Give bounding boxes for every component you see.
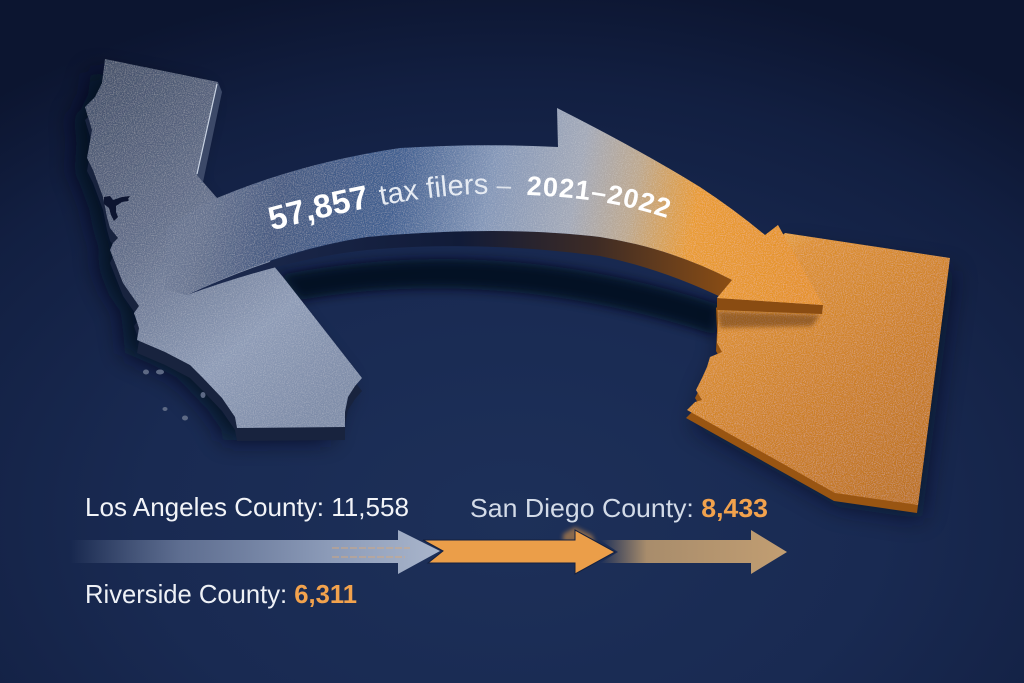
map: Arizona [686, 233, 950, 513]
arrow underside [187, 231, 732, 298]
California top surface [85, 59, 362, 428]
label: Los Angeles County: Los Angeles County: 11,558 [85, 492, 409, 522]
arrow: Riverside [423, 527, 615, 574]
label: Riverside County: Riverside County: 6,311 [85, 579, 357, 609]
Arizona extrusion [686, 241, 949, 513]
label: San Diego County: San Diego County: 8,433 [470, 493, 768, 523]
arrow head edge [717, 298, 823, 314]
arrow: San Diego [600, 530, 787, 574]
shadows [71, 71, 954, 519]
map: California [85, 59, 362, 441]
arrow shadow on Arizona [717, 311, 820, 328]
arrow label: 2021–2022 [527, 176, 670, 218]
arrow: Los Angeles [70, 530, 440, 574]
San Francisco bay [104, 196, 130, 221]
California extrusion [85, 72, 362, 441]
arrow label [268, 175, 670, 229]
big curved arrow [174, 108, 823, 330]
Arizona top surface [687, 233, 950, 505]
arrow label: tax filers [378, 175, 488, 205]
Channel islands [143, 370, 206, 420]
arrow top face [165, 108, 823, 305]
arrow label: 57,857 [268, 185, 365, 229]
bottom arrows [70, 527, 787, 574]
arrow label: – [496, 186, 511, 189]
